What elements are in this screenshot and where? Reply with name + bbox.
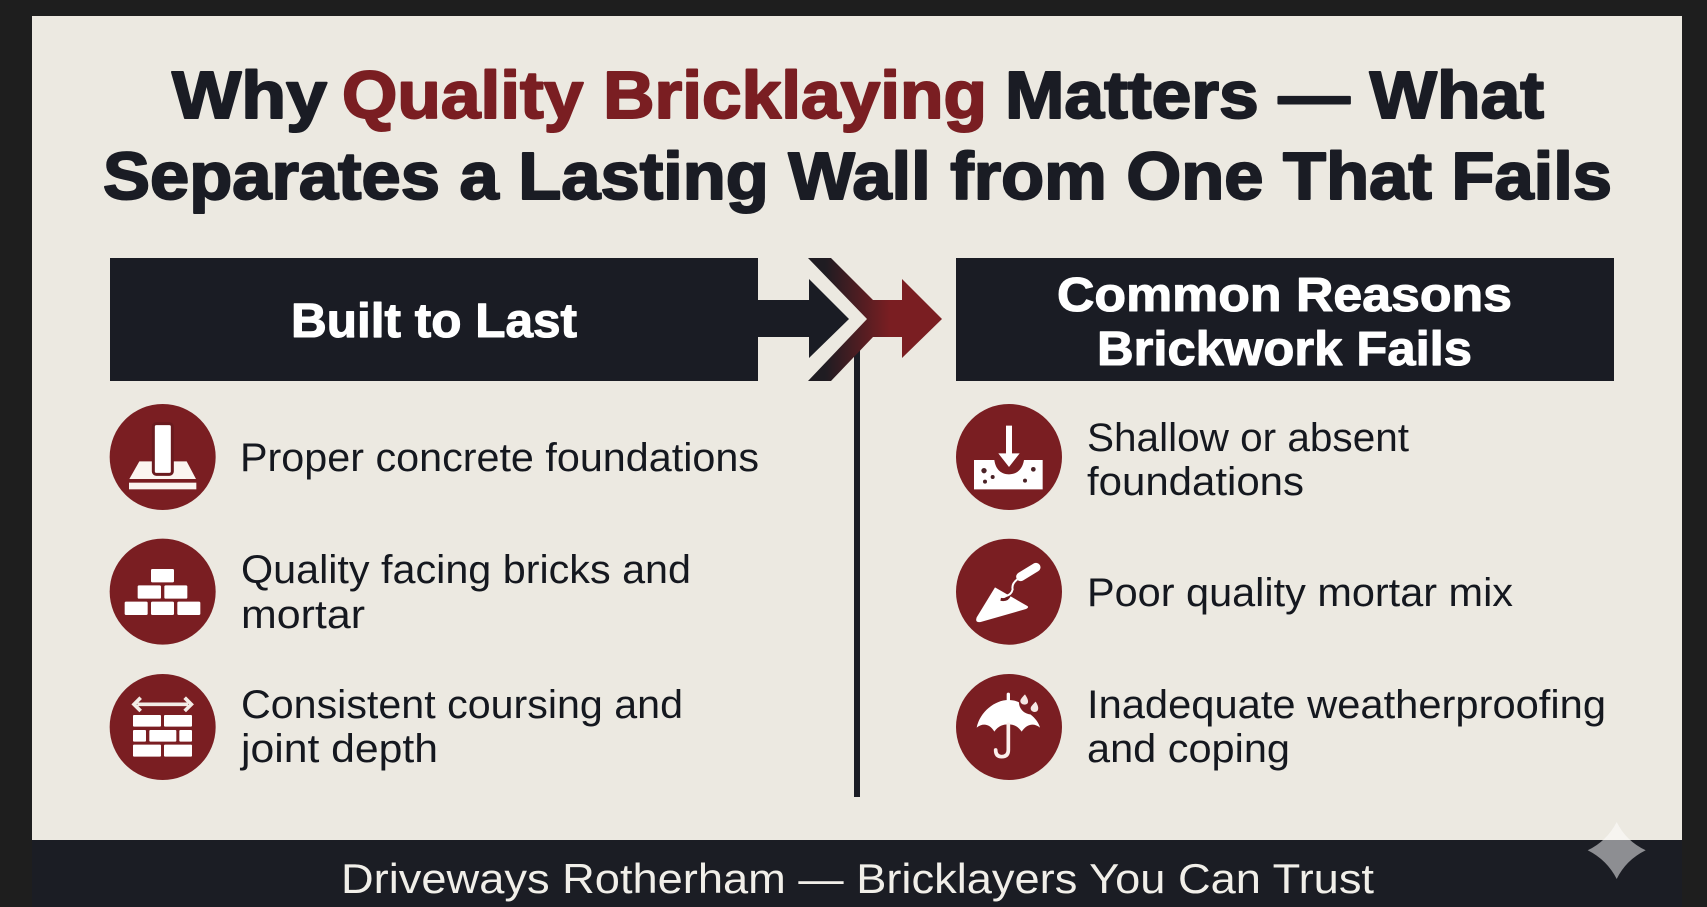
header: common reasons brickwork fails: Brickwork Fails bbox=[1097, 323, 1472, 376]
icon: bricks pyramid bbox=[110, 539, 216, 645]
icon: trowel bbox=[956, 539, 1062, 645]
footer text: Driveways Rotherham — Bricklayers You Can Trust bbox=[341, 855, 1374, 902]
text: inadequate weatherproofing and coping: Inadequate weatherproofing bbox=[1087, 683, 1606, 727]
header: built to last bbox=[110, 258, 758, 381]
central divider line bbox=[854, 350, 860, 797]
text: quality facing bricks and mortar: Quality facing bricks and bbox=[241, 548, 691, 592]
text: shallow or absent foundations: Shallow or absent bbox=[1087, 416, 1409, 460]
text: shallow or absent foundations: foundations bbox=[1087, 460, 1304, 504]
text: consistent coursing and joint depth: Consistent coursing and bbox=[241, 683, 683, 727]
icon: umbrella with rain bbox=[956, 674, 1062, 780]
title: Why bbox=[172, 58, 327, 133]
text: inadequate weatherproofing and coping bbox=[1087, 683, 1606, 771]
text: quality facing bricks and mortar: mortar bbox=[241, 593, 365, 637]
text: consistent coursing and joint depth: joint depth bbox=[240, 727, 438, 771]
title bbox=[103, 58, 1612, 214]
icon: shallow foundation bbox=[956, 404, 1062, 510]
title: Matters — What bbox=[1005, 58, 1544, 133]
text: inadequate weatherproofing and coping: and coping bbox=[1087, 727, 1290, 771]
text: proper concrete foundations: Proper concrete foundations bbox=[240, 436, 759, 480]
text: poor quality mortar mix: Poor quality mortar mix bbox=[1087, 571, 1513, 615]
text: consistent coursing and joint depth bbox=[240, 683, 683, 771]
panel: built to last items bbox=[110, 404, 759, 780]
text: shallow or absent foundations bbox=[1087, 416, 1409, 504]
header: common reasons brickwork fails bbox=[956, 258, 1614, 381]
icon: sparkle watermark bbox=[1588, 822, 1646, 879]
header: built to last: Built to Last bbox=[291, 295, 577, 348]
icon: coursing wall with arrow bbox=[110, 674, 216, 780]
title: Quality Bricklaying bbox=[342, 58, 987, 133]
footer band bbox=[32, 840, 1682, 907]
text: quality facing bricks and mortar bbox=[241, 548, 691, 637]
icon: foundation bbox=[110, 404, 216, 510]
panel: common failure items bbox=[956, 404, 1606, 780]
arrow: dark arrow from left header bbox=[758, 279, 849, 358]
arrow: red chevron arrow bbox=[808, 258, 942, 381]
header: common reasons brickwork fails: Common Reasons bbox=[1057, 269, 1512, 322]
title: Separates a Lasting Wall from One That Fails bbox=[103, 139, 1612, 214]
